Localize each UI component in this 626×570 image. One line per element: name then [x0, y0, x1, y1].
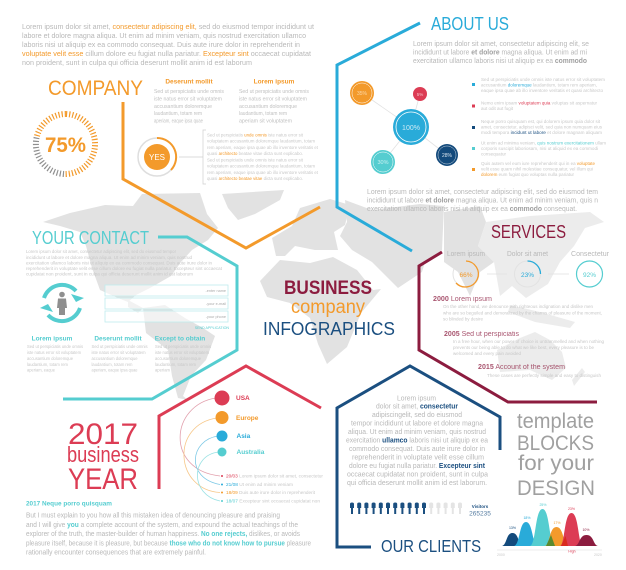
big year title: YEAR — [68, 463, 138, 496]
column: lorem ipsum: Sed ut perspiciatis unde omnis — [239, 89, 309, 95]
bell curve chart: 18% — [523, 516, 531, 520]
contact columns: accusantium doloremque — [27, 356, 74, 361]
clients text: Lorem ipsum — [397, 396, 436, 402]
contact text: reprehenderit in voluptate velit esse cillum dolore eu fugiat nulla pariatur. Excepteur sint occaecat — [26, 266, 223, 271]
company detail text: quasi architecto beatae vitae dicta sunt explicabo. — [207, 176, 303, 181]
big year title: business — [67, 442, 139, 467]
top intro text: voluptate velit esse cillum dolore eu fugiat nulla pariatur. Excepteur sint occaecat cupidatat — [22, 51, 311, 58]
heading: your contact: YOUR CONTACT — [32, 228, 149, 248]
panel: our clients — [337, 366, 500, 556]
about us list: amet, consectetur, adipisci velit, sed quia non numquam eius — [481, 124, 603, 130]
navy outline — [337, 366, 500, 547]
contact columns: Sed ut perspiciatis unde omnis — [92, 344, 148, 349]
contact columns — [27, 336, 212, 372]
gauge 75% — [36, 114, 95, 174]
about us list: Neque porro quisquam est, qui dolorem ipsum quia dolor sit — [481, 119, 601, 124]
about us intro: exercitation ullamco laboris nisi ut aliquip ex ea commodo — [413, 58, 587, 65]
contact columns: accusantium doloremque — [155, 356, 202, 361]
region links — [180, 390, 324, 504]
column: lorem ipsum: aperiam sit voluptatem — [239, 118, 292, 124]
bell curve chart: 13% — [509, 526, 516, 530]
column: deserunt mollit: Sed ut perspiciatis unde omnis — [154, 89, 224, 95]
gauge 75%: 75% — [45, 134, 86, 157]
contact columns: Lorem ipsum — [32, 336, 73, 342]
clients text: tempor incididunt ut labore et dolore magna — [351, 420, 483, 428]
year text: rationally encounter consequences that are extremely painful. — [26, 550, 206, 556]
world map — [43, 190, 494, 400]
bell curve chart: 25% — [539, 503, 547, 507]
column: lorem ipsum: iste natus error sit voluptatem — [239, 96, 307, 102]
timeline: who are so beguiled and demoralized by the charms of pleasure of the moment, — [443, 310, 602, 316]
bell curve chart: 17% — [553, 521, 561, 525]
region links: Europe — [236, 415, 259, 422]
big year title: 2017 — [68, 418, 138, 451]
region links: 18/07 Excepteur sint occaecat cupidatat non — [226, 498, 321, 504]
service rings: 92% — [583, 272, 596, 279]
service rings: Consectetur — [571, 251, 610, 258]
clients text — [346, 396, 488, 487]
region links: Asia — [236, 433, 251, 440]
region links: USA — [236, 395, 250, 402]
timeline: In a free hour, when our power of choice is untrammelled and when nothing — [453, 339, 605, 344]
timeline: so blinded by desire — [443, 316, 484, 322]
panel: about us — [337, 14, 606, 251]
centre title: INFOGRAPHICS — [263, 319, 395, 339]
contact columns: Sed ut perspiciatis unde omnis — [155, 344, 212, 349]
column: lorem ipsum: Lorem ipsum — [254, 78, 295, 86]
bubble chart: 5% — [417, 92, 423, 97]
about us list: Ut enim ad minima veniam, quis nostrum exercitationem ullam — [481, 140, 606, 146]
contact outline — [63, 237, 237, 399]
about us list: velit esse quam nihil molestiae consequatur, vel illum qui — [481, 166, 593, 172]
about us lower text — [367, 189, 598, 213]
contact text: Lorem ipsum dolor sit amet, consectetur adipiscing elit, sed do eiusmod tempor — [26, 249, 177, 254]
heading: services: SERVICES — [491, 222, 566, 242]
bell curve chart: 10% — [582, 528, 590, 532]
year text: 2017 Neque porro quisquam — [26, 500, 112, 508]
timeline: welcomed and every pain avoided — [453, 351, 522, 356]
column: deserunt mollit: Deserunt mollit — [165, 78, 213, 86]
contact columns: aperiam, eaque — [27, 368, 56, 372]
bubble chart: 100% — [402, 125, 420, 132]
clients text: occaecat cupidatat non proident, sunt in culpa — [347, 472, 488, 479]
year text: and I will give you a complete account of the system, and expound the actual teachings of the — [26, 522, 298, 529]
clients text: dolore eu fugiat nulla pariatur. Excepteur sint — [349, 463, 486, 470]
service rings: Dolor sit amet — [507, 251, 548, 258]
about us list: Quis autem vel eum iure reprehenderit qui in ea voluptate — [481, 161, 596, 166]
column: deserunt mollit: aperiam, eaque ipsa quae — [154, 118, 203, 124]
contact columns: aperiam, eaque ipsa quae — [92, 368, 138, 372]
contact columns: Deserunt mollit — [94, 336, 142, 342]
region links: 18/09 Duis aute irure dolor in reprehenderit — [226, 490, 316, 495]
centre title: company — [291, 297, 365, 318]
column: deserunt mollit: accusantium doloremque — [154, 104, 212, 110]
timeline: On the other hand, we denounce with righteous indignation and dislike men — [443, 304, 594, 309]
top intro text — [22, 24, 314, 67]
contact columns: accusantium doloremque — [92, 356, 138, 361]
YES badge: YES — [149, 153, 165, 162]
centre title: BUSINESS — [284, 277, 372, 299]
about us list: aut odit aut fugit — [481, 106, 514, 111]
contact columns: Except to obtain — [155, 336, 205, 342]
about us intro: Lorem ipsum dolor sit amet, consectetur adipiscing elit, se — [413, 41, 589, 48]
clients text: commodo consequat. Duis aute irure dolor in — [349, 446, 485, 453]
template blocks heading: DESIGN — [517, 477, 595, 500]
year text: pleasure itself, because it is pleasure, but because those who do not know how to pursue pleasure — [26, 540, 311, 548]
bell curve chart: 23% — [568, 507, 575, 511]
service rings: 66% — [459, 272, 473, 279]
big year title — [67, 418, 139, 496]
bubble chart: 30% — [377, 160, 389, 166]
heading: our clients: OUR CLIENTS — [381, 536, 481, 556]
about us lower text: incididunt ut labore et dolore magna aliqua. Ut enim ad minim veniam, quis n — [367, 198, 598, 204]
clients text: adipiscingelit, sed do eiusmod — [372, 412, 462, 419]
contact form: -your phone — [206, 315, 226, 319]
clients text: exercitation ullamco laboris nisi ut aliquip ex ea — [346, 438, 488, 444]
company detail text: rem aperiam, eaque ipsa quae ab illo inventore veritatis et — [207, 145, 319, 150]
contact form: -enter name — [206, 289, 226, 293]
contact text: incididunt ut labore et dolore magna aliqua. Ut enim ad minim veniam, quis nostrud — [26, 255, 193, 260]
bubble chart — [350, 81, 458, 174]
column: deserunt mollit: iste natus error sit voluptatem — [154, 96, 222, 102]
about us list: Nemo enim ipsam voluptatem quia voluptas sit aspernatur — [481, 100, 598, 106]
top intro text: labore et dolore magna aliqua. Ut enim ad minim veniam, quis nostrud exercitation ullamco — [22, 33, 306, 40]
about us intro: incididunt ut labore et dolore magna aliqua. Ut enim ad mi — [413, 50, 587, 56]
about us list: accusantium doloremque laudantium, totam rem aperiam, — [481, 82, 597, 88]
contact columns: iste natus error sit voluptatem — [155, 350, 209, 355]
company detail text: quasi architecto beatae vitae dicta sunt explicabo. — [207, 151, 303, 156]
contact columns: laudantium, totam rem — [92, 362, 133, 367]
timeline: These cases are perfectly simple and easy to distinguish — [487, 373, 602, 378]
bell curve chart: 2020 — [594, 553, 602, 557]
heading: about us: ABOUT US — [431, 14, 509, 34]
timeline — [433, 296, 605, 378]
contact form: -your e-mail — [206, 302, 226, 306]
company detail text: Sed ut perspiciatis unde omnis iste natus error sit — [207, 158, 304, 162]
visitors pictogram: 265235 — [469, 510, 491, 518]
clients text: dolor sit amet, consectetur — [376, 404, 458, 411]
year text: explorer of the truth, the master-builder of human happiness. No one rejects, dislikes, or avoids — [26, 531, 300, 538]
region links: Australia — [236, 449, 265, 456]
visitors pictogram: Visitors — [472, 504, 489, 509]
about us list: eaque ipsa quae ab illo inventore veritatis et quasi architecto — [481, 88, 604, 93]
contact columns: iste natus error sit voluptatem — [27, 350, 81, 355]
timeline: 2015 Account of the system — [478, 364, 565, 371]
contact columns: iste natus error sit voluptatem — [92, 350, 146, 355]
contact columns: laudantium, totam rem — [155, 362, 196, 367]
company detail text — [207, 132, 319, 181]
template blocks heading: template — [517, 410, 594, 433]
contact form — [105, 285, 229, 330]
visitors pictogram — [350, 502, 491, 518]
service rings — [447, 251, 610, 287]
company detail text: Sed ut perspiciatis unde omnis iste natus error sit — [207, 132, 304, 138]
contact columns: laudantium, totam rem — [27, 362, 68, 367]
bell curve chart: High — [568, 550, 576, 554]
top intro text: non proident, sunt in culpa qui officia deserunt mollit anim id est laborum — [22, 60, 252, 67]
column: lorem ipsum: accusantium doloremque — [239, 104, 297, 110]
timeline: 2005 Sed ut perspiciatis — [444, 331, 519, 338]
service rings: 23% — [521, 272, 534, 279]
bell curve chart — [497, 503, 602, 557]
region links: 20/03 Lorem ipsum dolor sit amet, consectetur — [226, 474, 324, 478]
about us list: Sed ut perspiciatis unde omnis iste natus error sit voluptatem — [481, 77, 605, 82]
panel: 2017 business year — [26, 366, 324, 556]
template blocks heading — [517, 410, 595, 500]
bubble chart: 35% — [357, 91, 368, 97]
template blocks heading: for your — [518, 452, 594, 475]
clients text: qui officia deserunt mollit anim id est laborum. — [347, 480, 487, 487]
column: deserunt mollit — [154, 78, 224, 124]
heading: company: COMPANY — [48, 77, 143, 100]
timeline: 2000 Lorem ipsum — [433, 296, 492, 303]
centre title — [263, 277, 395, 339]
about us lower text: exercitation ullamco laboris nisi ut aliquip ex ea commodo consequat. — [367, 206, 577, 213]
about us list: corporis suscipit laboriosam, nisi ut aliquid ex ea commodi — [481, 146, 598, 151]
service rings: Lorem ipsum — [447, 251, 485, 258]
template blocks heading: BLOCKS — [517, 432, 594, 455]
year text — [26, 500, 311, 556]
panel: services — [419, 222, 610, 402]
services outline — [419, 252, 597, 402]
about us list: consequatur — [481, 152, 507, 156]
top intro text: Lorem ipsum dolor sit amet, consectetur adipiscing elit, sed do eiusmod tempor incididunt ut — [22, 24, 314, 31]
company detail text: voluptatem accusantium doloremque laudantium, totam — [207, 139, 315, 144]
panel: your contact — [26, 228, 237, 399]
red outline — [159, 366, 321, 489]
column: deserunt mollit: laudantium, totam rem — [154, 111, 202, 117]
top intro text: laboris nisi ut aliquip ex ea commodo consequat. Duis aute irure dolor in reprehenderit in — [22, 42, 300, 49]
clients text: reprehenderit in voluptate velit esse cillum — [352, 454, 484, 462]
icon: person with cycle arrows — [40, 285, 84, 321]
contact form: SEND APPLICATION — [195, 326, 229, 330]
contact text: cupidatat non proident, sunt in culpa qui officia deserunt mollit anim id est laborum — [26, 272, 193, 276]
contact text: exercitation ullamco laboris nisi ut aliquip ex ea commodo consequat. Duis aute irure dolor in — [26, 260, 213, 266]
about us intro — [413, 41, 589, 65]
contact text — [26, 249, 223, 276]
contact columns: aperiam — [155, 368, 170, 372]
year text: But I must explain to you how all this mistaken idea of denouncing pleasure and praising — [26, 512, 280, 520]
map: Asia-Pacific, faded — [478, 212, 604, 386]
YES badge — [138, 130, 206, 184]
region links: 21/08 Ut enim ad minim veniam — [226, 482, 293, 487]
clients text: aliqua. Ut enim ad minim veniam, quis nostrud — [348, 429, 486, 436]
company detail text: voluptatem accusantium doloremque laudantium, totam — [207, 164, 315, 169]
about us outline — [337, 23, 420, 251]
timeline: prevents our being able to do what we like best, every pleasure is to be — [453, 345, 595, 350]
column: lorem ipsum — [239, 78, 309, 124]
column: lorem ipsum: laudantium, totam rem — [239, 111, 287, 117]
bell curve chart: 2000 — [497, 553, 505, 557]
about us list — [472, 77, 606, 177]
contact columns: Sed ut perspiciatis unde omnis — [27, 344, 84, 349]
panel: company — [36, 77, 320, 248]
about us list: modi tempora incidunt ut labore et dolore magnam aliquam — [481, 130, 602, 135]
company outline — [123, 102, 320, 248]
bubble chart: 28% — [442, 153, 453, 159]
about us list: dolorem eum fugiat quo voluptas nulla pariatur — [481, 172, 575, 177]
company detail text: rem aperiam, eaque ipsa quae ab illo inventore veritatis et — [207, 170, 319, 175]
about us lower text: Lorem ipsum dolor sit amet, consectetur adipiscing elit, sed do eiusmod tem — [367, 189, 598, 196]
